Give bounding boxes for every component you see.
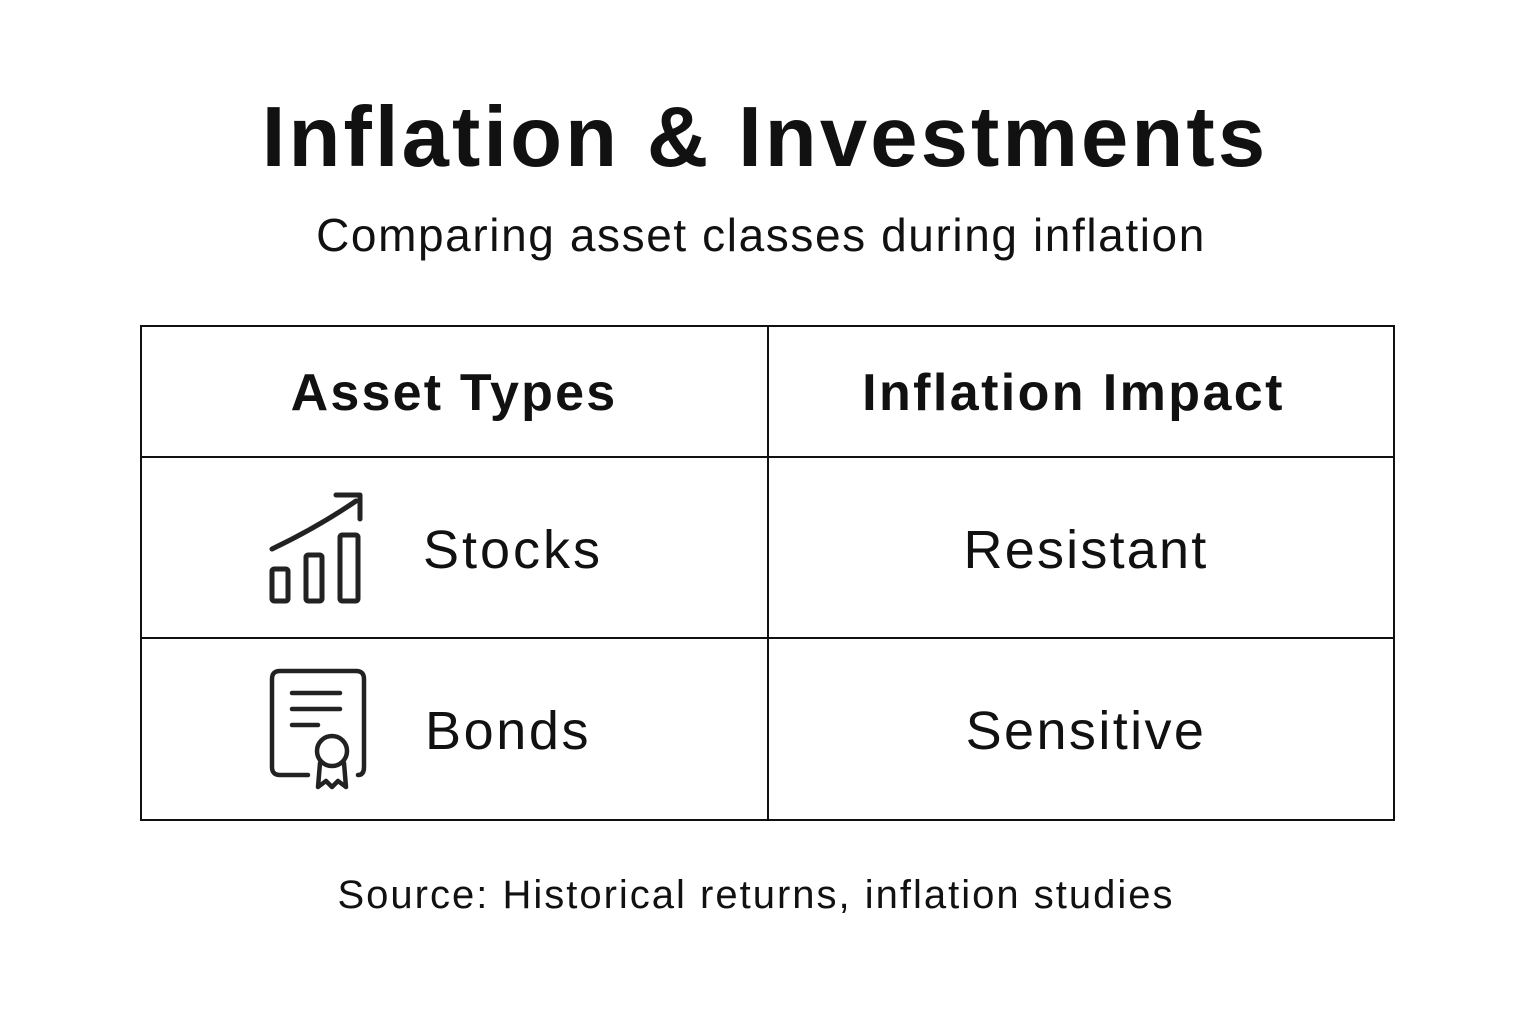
subtitle: Comparing asset classes during inflation xyxy=(316,209,1206,261)
row label: stocks: Stocks xyxy=(423,520,603,580)
title: Inflation & Investments xyxy=(262,90,1268,185)
row label: bonds: Bonds xyxy=(425,701,591,761)
row value: sensitive: Sensitive xyxy=(966,701,1206,761)
header: asset types: Asset Types xyxy=(291,364,617,422)
row value: resistant: Resistant xyxy=(964,520,1208,580)
table xyxy=(140,325,1395,821)
icon: stocks chart xyxy=(270,492,362,604)
source note: Source: Historical returns, inflation studies xyxy=(338,873,1174,917)
icon: bond certificate xyxy=(270,668,366,790)
header: inflation impact: Inflation Impact xyxy=(862,364,1285,422)
